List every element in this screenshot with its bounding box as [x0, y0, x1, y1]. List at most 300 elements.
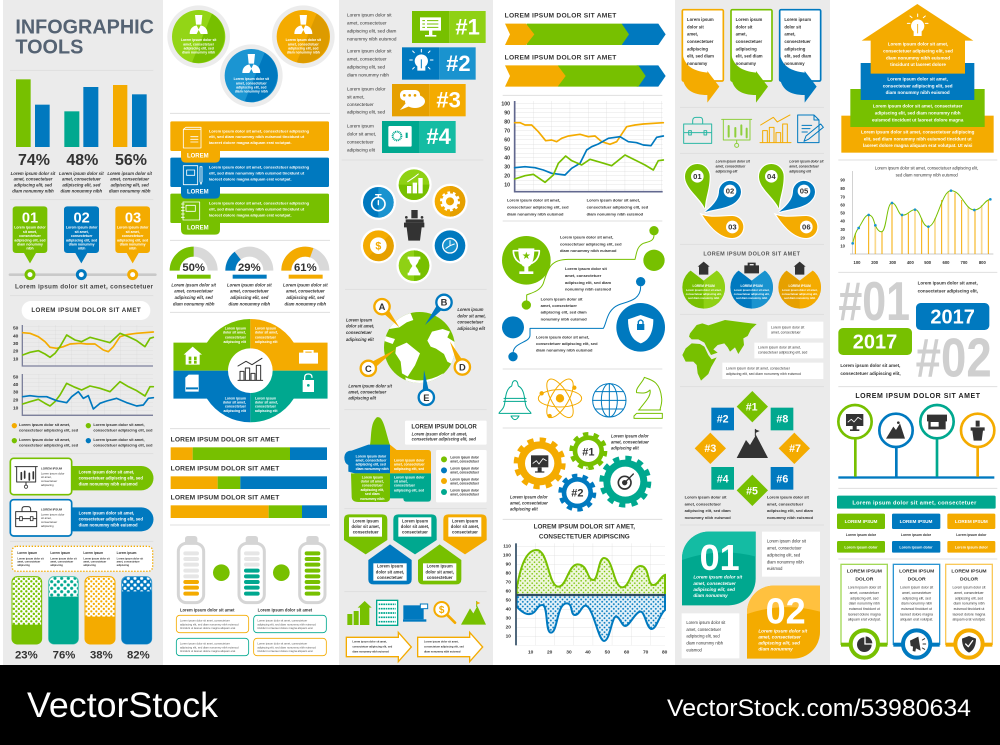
dotted note box: Lorem ipsum dolor sit: [17, 558, 44, 561]
text box bottom: amet, consectetuer: [686, 627, 722, 632]
arrow card orange: amet,: [687, 32, 698, 37]
year note bottom: consectetuer adipiscing elit,: [840, 371, 901, 376]
text box bottom: euismod: [686, 647, 702, 652]
labeled tabs: Lorem ipsum dolor: [899, 545, 933, 549]
leaf card 02: Lorem ipsum dolor sit: [758, 628, 808, 633]
line chart 2: 30: [13, 390, 19, 396]
thumbs heading card: LOREM IPSUM DOLOR: [411, 424, 478, 430]
pyramid layer green: Lorem ipsum dolor sit amet, consectetuer: [873, 104, 963, 109]
profile circle blue: adipiscing elit, sed: [236, 86, 266, 90]
mirrored area chart: 10: [506, 634, 511, 640]
arrow tile teal down: [393, 514, 437, 554]
ranking row 3: sit amet,: [347, 94, 365, 99]
leaf card 01: Lorem ipsum dolor sit: [693, 575, 743, 580]
line chart 2: 50: [13, 374, 19, 380]
numbered ring: #7: [789, 443, 801, 455]
text box bottom: [682, 613, 739, 658]
banner orange: book: Lorem ipsum dolor sit amet, consectetuer adipiscing: [209, 128, 310, 133]
thumbs-up diagram: amet, consectetuer: [356, 459, 387, 463]
percent labels and captions: adipiscing elit, sed: [14, 183, 52, 188]
arrow card green: elit, sed diam: [736, 54, 763, 59]
step card 03: Lorem ipsum dolor: [117, 226, 149, 230]
chart captions: consectetuer adipiscing elit, sed: [507, 205, 569, 210]
gauge 61%: Lorem ipsum dolor sit: [283, 283, 328, 288]
dotted note box: amet, consectetuer: [50, 561, 73, 564]
ranking row 2: adipiscing elit, sed: [347, 65, 385, 70]
percent labels and captions: Lorem ipsum dolor sit: [107, 171, 153, 176]
ring captions: Lorem ipsum dolor sit: [767, 494, 810, 499]
gears diagram: #1: [582, 446, 594, 458]
ranking row 3: #3: [436, 87, 461, 112]
ranking row 1: Lorem ipsum dolor sit: [347, 13, 392, 18]
icon: speaker at podium: [404, 210, 424, 241]
footer: watermark band: VectorStock.com/53980634: [667, 695, 971, 722]
leaf card 01: 01: [700, 537, 740, 578]
badge card blue: laoreet dolore magna: [900, 612, 933, 616]
arrow card orange: elit, sed diam: [687, 54, 714, 59]
trophy node: adipiscing elit, sed diam: [565, 280, 612, 285]
gauge 61%: diam nonummy nibh: [285, 301, 327, 306]
gauge 29%: adipiscing elit, sed: [230, 295, 269, 300]
arrow card orange: nonummy: [687, 61, 708, 66]
badge card orange: LOREM IPSUM: [951, 569, 987, 575]
arrow callout 2: consectetuer adipiscing elit, sed: [424, 644, 464, 648]
year badge blue: [916, 303, 989, 330]
thumbs-up diagram: adipiscing elit, sed: [394, 467, 424, 471]
profile circle orange: adipiscing elit, sed: [288, 47, 318, 51]
chart legend: consectetuer adipiscing elit, sed: [93, 429, 153, 433]
badge card orange: [946, 564, 992, 658]
map note 2: consectetuer adipiscing elit, sed: [758, 351, 807, 355]
ranking row 3: adipiscing elit, sed: [347, 110, 385, 115]
note boxes: tincidunt ut laoreet dolore magna aliquam erat: [257, 649, 313, 653]
line chart 1: 40: [13, 333, 19, 339]
arrow tile green down: consectetuer: [353, 530, 379, 535]
callout: presentation: sit amet,: [41, 475, 52, 479]
step card 02: 02: [74, 211, 90, 227]
ranking row 4: dolor sit amet,: [347, 131, 376, 136]
spline chart: 30: [840, 227, 846, 232]
tube chart: 23%: [15, 650, 38, 662]
arrow tile green down: dolor sit amet,: [351, 524, 380, 529]
arrow card orange: Lorem ipsum: [687, 17, 714, 22]
callout: presentation: [10, 458, 153, 495]
year badge blue: 2017: [930, 306, 975, 328]
arrow card green: amet,: [736, 32, 747, 37]
badge card orange: adipiscing elit, sed: [955, 596, 983, 600]
mirrored area chart: 40: [506, 607, 511, 613]
mirrored area chart: 20: [547, 650, 553, 656]
percent labels and captions: Lorem ipsum dolor sit: [59, 171, 104, 176]
labeled tabs: LOREM IPSUM: [955, 519, 988, 524]
battery captions: Lorem ipsum dolor sit amet: [258, 608, 313, 613]
step card 02: consectetuer: [71, 234, 93, 238]
notched circle blue: [730, 263, 773, 309]
banner blue: notebook: [170, 158, 329, 199]
arrow tile green up: dolor sit amet,: [425, 569, 454, 574]
spline chart: 70: [840, 194, 846, 199]
globe captions: Lorem ipsum: [346, 318, 372, 323]
step card 01: adipiscing elit, sed: [14, 238, 46, 242]
badge card green: amet, consectetuer: [850, 591, 880, 595]
profile circle blue: [220, 44, 283, 107]
thumbs legend: amet, consectetuer: [450, 492, 480, 496]
arrow card blue: nonummy: [784, 61, 805, 66]
notched circle orange: sed diam nonummy nibh: [784, 296, 816, 300]
badge card green: laoreet dolore magna: [848, 612, 881, 616]
quadrant cross diagram: dolor sit amet,: [255, 331, 278, 335]
trophy node: ★: [522, 251, 531, 261]
dotted note box: amet, consectetuer: [117, 561, 140, 564]
spline chart caption: Lorem ipsum dolor sit amet, consectetuer adipiscing elit,: [875, 166, 978, 171]
callout: presentation: consectetuer: [41, 479, 57, 483]
notched circle orange: [778, 262, 821, 309]
arrow card blue: [780, 10, 821, 103]
map note 2: Lorem ipsum dolor sit amet,: [758, 346, 801, 350]
badge card orange: diam nonummy nibh: [953, 602, 985, 606]
ranking row 4: adipiscing elit: [347, 147, 376, 152]
gears diagram: Lorem ipsum dolor: [510, 494, 548, 499]
mirrored area chart: 90: [506, 562, 511, 568]
gauge 61%: [283, 252, 328, 306]
numbered ring: #3: [704, 443, 716, 455]
percent labels and captions: diam nonummy nibh: [12, 188, 54, 193]
stacked bar 2: LOREM IPSUM DOLOR SIT AMET: [171, 465, 279, 472]
line chart 2: 40: [13, 382, 19, 388]
mirrored area chart: 30: [566, 650, 572, 656]
battery low: [178, 536, 204, 603]
bar chart: three paired bars: [16, 79, 147, 147]
spline chart: 90: [840, 178, 846, 183]
globe captions: amet, consectetuer: [348, 389, 387, 394]
profile circle orange: diam nonummy nibh: [287, 51, 320, 55]
thumbs-up diagram: [344, 417, 431, 502]
world map: [682, 320, 757, 381]
thumbs-up diagram: Lorem ipsum dolor: [356, 454, 387, 458]
banner green: spiral pad: Lorem ipsum dolor sit amet, consectetuer adipiscing: [209, 200, 310, 205]
map note 3: [722, 363, 823, 379]
step card 03: adipiscing elit, sed: [117, 238, 148, 242]
quadrant cross diagram: Lorem ipsum: [225, 326, 246, 330]
profile circle orange: [272, 5, 335, 68]
profile circle orange: amet, consectetuer: [288, 42, 319, 46]
security node: diam nonummy nibh euismod: [536, 348, 593, 353]
chart legend: [12, 423, 153, 448]
arrow card blue: consectetuer: [784, 39, 811, 44]
numbered ring: #4: [717, 473, 729, 485]
notched circle orange: consectetuer adipiscing elit,: [782, 292, 818, 296]
badge card blue: euismod tincidunt ut: [901, 607, 932, 611]
line chart 1: 50: [13, 326, 19, 332]
stacked bar 3: LOREM IPSUM DOLOR SIT AMET: [171, 494, 279, 501]
badge card green: [841, 564, 887, 658]
footer: watermark band: [0, 665, 1000, 745]
spline chart: 50: [840, 211, 846, 216]
teardrop captions: [716, 159, 824, 174]
teardrop cluster 04-06: 04: [767, 172, 776, 181]
profile circle green: [167, 5, 230, 68]
area chart title: CONSECTETUER ADIPISCING: [539, 533, 630, 540]
percent labels and captions: amet, consectetuer: [14, 177, 53, 182]
badge card green: euismod tincidunt ut: [849, 607, 880, 611]
ranking row 3: [347, 84, 466, 116]
thumbs legend: Lorem ipsum dolor: [450, 488, 480, 492]
callout: briefcase: adipiscing: [41, 524, 54, 528]
main line chart: [501, 101, 663, 192]
spline chart: 200: [871, 260, 879, 265]
note boxes: tincidunt ut laoreet dolore magna aliquam erat: [180, 649, 236, 653]
gauge 29%: Lorem ipsum dolor sit: [227, 283, 272, 288]
percent labels and captions: amet, consectetuer: [62, 177, 101, 182]
dotted note box: adipiscing: [83, 564, 96, 567]
arrow tile green up: Lorem ipsum: [427, 564, 453, 569]
heading strip: [837, 496, 996, 509]
timeline: [9, 271, 157, 279]
arrow card blue: elit, sed diam: [784, 54, 811, 59]
numbered ring: #2: [717, 414, 729, 426]
tube chart: 82%: [127, 650, 150, 662]
gauge 61%: adipiscing elit, sed: [286, 295, 325, 300]
text box top: adipiscing elit, sed: [767, 552, 800, 557]
line icons row: [684, 115, 823, 147]
line chart 2: 10: [13, 405, 19, 411]
step card 02: Lorem ipsum dolor: [66, 226, 98, 230]
trophy node: nonummy nibh euismod: [565, 287, 612, 292]
pin section heading: LOREM IPSUM DOLOR SIT AMET: [855, 393, 981, 400]
security node: Lorem ipsum dolor sit amet,: [536, 334, 589, 339]
dotted note box: adipiscing: [17, 564, 30, 567]
badge card orange: DOLOR: [960, 577, 978, 583]
ranking row 1: amet, consectetuer: [347, 20, 387, 25]
mirrored area chart: 40: [585, 650, 591, 656]
badge card orange: laoreet dolore magna: [953, 612, 985, 616]
pyramid layer green: adipiscing elit, sed diam nonummy nibh: [875, 111, 961, 116]
text box bottom: diam nonummy nibh: [686, 641, 723, 646]
thumbs legend: Lorem ipsum dolor: [450, 477, 480, 481]
arrow callout 2: Lorem ipsum dolor sit amet,: [424, 639, 459, 643]
badge card green: LOREM IPSUM: [847, 569, 882, 575]
thumbs legend: amet, consectetuer: [450, 460, 480, 464]
ranking row 4: Lorem ipsum: [347, 124, 374, 129]
note boxes: adipiscing elit, sed diam nonummy nibh euismod: [257, 622, 316, 626]
spline chart: 60: [840, 202, 846, 207]
thumbs legend: Lorem ipsum dolor: [450, 456, 480, 460]
banner orange: book: elit, sed diam nonummy nibh euismod tincidunt ut: [209, 134, 305, 139]
badge card green: DOLOR: [855, 577, 874, 583]
main line chart: 20: [504, 174, 510, 180]
line chart 2: [13, 374, 153, 415]
gauge 61%: amet, consectetuer: [286, 289, 325, 294]
main line chart: 40: [504, 156, 510, 162]
chevron bar 2: [505, 54, 666, 87]
globe with pins: D: [459, 363, 466, 373]
gears diagram: adipiscing elit: [611, 446, 639, 451]
gears diagram: Lorem ipsum dolor: [611, 433, 649, 438]
map note 3: Lorem ipsum dolor sit amet, consectetuer: [726, 366, 791, 370]
note boxes: tincidunt ut laoreet dolore magna aliquam erat: [180, 626, 236, 630]
arrow card orange: [682, 10, 723, 103]
arrow card blue: amet,: [784, 32, 795, 37]
thumbs legend: amet, consectetuer: [450, 481, 480, 485]
arrow tile orange down: dolor sit amet,: [451, 524, 479, 529]
step card 01: nibh: [26, 247, 34, 251]
mirrored area chart: 60: [624, 650, 630, 656]
chart legend: Lorem ipsum dolor sit amet,: [19, 438, 70, 442]
arrow callout 1: [346, 632, 411, 662]
notched circle green: consectetuer adipiscing elit,: [686, 292, 722, 296]
arrow tile teal down: Lorem ipsum: [402, 518, 428, 523]
teardrop captions: Lorem ipsum dolor sit: [716, 159, 751, 163]
globe captions: dolor sit amet,: [346, 323, 374, 328]
arrow tile blue up: [368, 544, 412, 584]
panel: column 6: [837, 4, 997, 658]
icon ring: [361, 167, 468, 283]
numbered ring: [695, 391, 810, 506]
map note 1: amet, consectetuer: [771, 331, 801, 335]
teardrop captions: amet, consectetuer: [789, 164, 820, 168]
ring captions: Lorem ipsum dolor sit: [685, 494, 727, 499]
arrow callout 2: [418, 632, 483, 662]
numbered ring: #1: [746, 401, 758, 413]
dotted note box: amet, consectetuer: [83, 561, 106, 564]
ranking row 1: nonummy nibh euismod: [347, 36, 397, 41]
arrow card green: Lorem ipsum: [736, 17, 763, 22]
arrow card blue: Lorem ipsum: [784, 17, 811, 22]
ranking row 4: consectetuer: [347, 140, 374, 145]
chart legend: Lorem ipsum dolor sit amet,: [93, 438, 145, 442]
thumbs-up diagram: adipiscing elit, sed: [356, 463, 386, 467]
labeled tabs: [837, 514, 995, 553]
dotted note box: adipiscing: [117, 564, 130, 567]
main line chart: 80: [504, 120, 510, 126]
step card 01: 01: [22, 211, 38, 227]
map note 3: adipiscing elit, sed diam nonummy nibh euismod: [726, 372, 801, 376]
percent labels and captions: 74%: [18, 152, 50, 169]
arrow tile green up: consectetuer: [427, 575, 453, 580]
mirrored area chart: 50: [506, 598, 511, 604]
percent labels and captions: 48%: [66, 152, 98, 169]
globe captions: Lorem ipsum: [457, 307, 484, 312]
pyramid layer bottom: elit, sed diam nonummy nibh euismod tincidunt ut: [864, 136, 972, 141]
house top layer: consectetuer adipiscing elit, sed: [883, 49, 953, 54]
mirrored area chart: 110: [503, 544, 511, 550]
quadrant cross diagram: consectetuer: [255, 335, 277, 339]
ranking row 2: diam nonummy nibh: [347, 72, 389, 77]
stacked bar 1: [171, 437, 327, 460]
pyramid layer blue: [861, 63, 974, 100]
callout: briefcase: consectetuer adipiscing elit, sed: [79, 516, 143, 521]
pyramid layer bottom: laoreet dolore magna aliquam erat volutpat. Ut wisi: [863, 143, 972, 148]
arrow card orange: dolor sit: [687, 24, 704, 29]
callout: presentation: diam nonummy nibh euismod: [79, 481, 138, 486]
quadrant cross diagram: Lorem ipsum: [225, 396, 246, 400]
gauge 50%: 50%: [182, 262, 205, 274]
thumbs-up diagram: adipiscing elit, sed: [394, 488, 424, 492]
arrow card blue: dolor sit: [784, 24, 802, 29]
panel: column 5: [675, 0, 830, 665]
chart legend: Lorem ipsum dolor sit amet,: [19, 423, 70, 427]
gears diagram: #2: [571, 488, 583, 500]
thumbs-up diagram: adipiscing elit,: [361, 488, 384, 492]
stacked bar 2: [171, 465, 327, 489]
thumbs-up diagram: dolor sit amet,: [361, 480, 384, 484]
chart legend: consectetuer adipiscing elit, sed: [19, 429, 79, 433]
dotted note box: Lorem ipsum: [50, 551, 70, 555]
profile circle green: amet, consectetuer: [183, 42, 215, 46]
trophy node: diam nonummy nibh euismod: [560, 248, 617, 253]
ring captions: amet, consectetuer: [685, 501, 721, 506]
icon: chess knight: [634, 377, 662, 418]
percent labels and captions: diam nonummy nibh: [61, 188, 103, 193]
teardrop captions: adipiscing elit: [789, 170, 812, 174]
notched circle blue: consectetuer adipiscing elit,: [734, 292, 770, 296]
icon row: [347, 600, 486, 625]
callout: briefcase: Lorem ipsum dolor: [41, 513, 64, 517]
trophy node: amet, consectetuer: [541, 303, 577, 308]
main line chart: 60: [504, 138, 510, 144]
area chart title: LOREM IPSUM DOLOR SIT AMET,: [534, 524, 635, 531]
profile circle green: adipiscing elit, sed: [184, 47, 214, 51]
notched circle blue: sed diam nonummy nibh: [736, 296, 768, 300]
step card 02: adipiscing elit, sed: [66, 238, 97, 242]
numbered ring: #5: [746, 485, 758, 497]
banner blue: notebook: elit, sed diam nonummy nibh euismod tincidunt ut: [209, 170, 305, 175]
arrow tile green up: [418, 544, 461, 584]
quadrant cross diagram: adipiscing elit: [255, 340, 278, 344]
line chart 1: 20: [13, 349, 19, 355]
tube chart: 38%: [90, 650, 113, 662]
note boxes: adipiscing elit, sed diam nonummy nibh euismod: [180, 622, 239, 626]
globe captions: adipiscing elit: [348, 395, 377, 400]
banner orange: book: LOREM: [187, 154, 209, 160]
callout: briefcase: consectetuer: [41, 520, 57, 524]
gauge 29%: 29%: [238, 262, 261, 274]
leaf card 01: [682, 532, 756, 605]
mirrored area chart: 30: [506, 616, 511, 622]
main line chart: 90: [504, 111, 510, 117]
ring captions: adipiscing elit, sed diam: [685, 508, 731, 513]
banner blue: notebook: LOREM: [187, 190, 209, 196]
chart captions: consectetuer adipiscing elit, sed: [587, 205, 649, 210]
thumbs-up diagram: amet, consectetuer: [394, 462, 425, 466]
chart captions: [507, 198, 649, 216]
ranking row 4: [347, 121, 456, 153]
thumbs heading card: consectetuer adipiscing elit, sed: [412, 437, 476, 442]
mirrored area chart: 10: [528, 650, 534, 656]
ranking row 1: #1: [455, 15, 480, 40]
line chart 1: [13, 325, 153, 366]
spline chart: 40: [840, 219, 846, 224]
ring captions: nonummy nibh euismod: [685, 515, 731, 520]
arrow tile green down: Lorem ipsum: [353, 518, 379, 523]
pyramid layer green: [850, 89, 985, 127]
badge card green: adipiscing elit, sed: [850, 596, 879, 600]
profile circle blue: amet, consectetuer: [236, 81, 267, 85]
teardrop captions: Lorem ipsum dolor sit: [789, 159, 824, 163]
thumbs legend: Lorem ipsum dolor: [450, 467, 480, 471]
badge card blue: aliquam erat volutpat.: [900, 618, 933, 622]
spline chart: 20: [840, 235, 846, 240]
trophy node: consectetuer adipiscing elit, sed: [560, 241, 622, 246]
gears diagram: amet, consectetuer: [510, 501, 548, 506]
icon: mountain flag: [737, 429, 768, 458]
tube chart: 76%: [53, 650, 75, 662]
arrow tile orange down: Lorem ipsum: [452, 518, 478, 523]
spline chart: 600: [943, 260, 950, 265]
arrow tile green down: [344, 514, 387, 554]
labeled tabs: Lorem ipsum dolor: [901, 533, 932, 537]
badge card blue: adipiscing elit, sed: [903, 596, 931, 600]
